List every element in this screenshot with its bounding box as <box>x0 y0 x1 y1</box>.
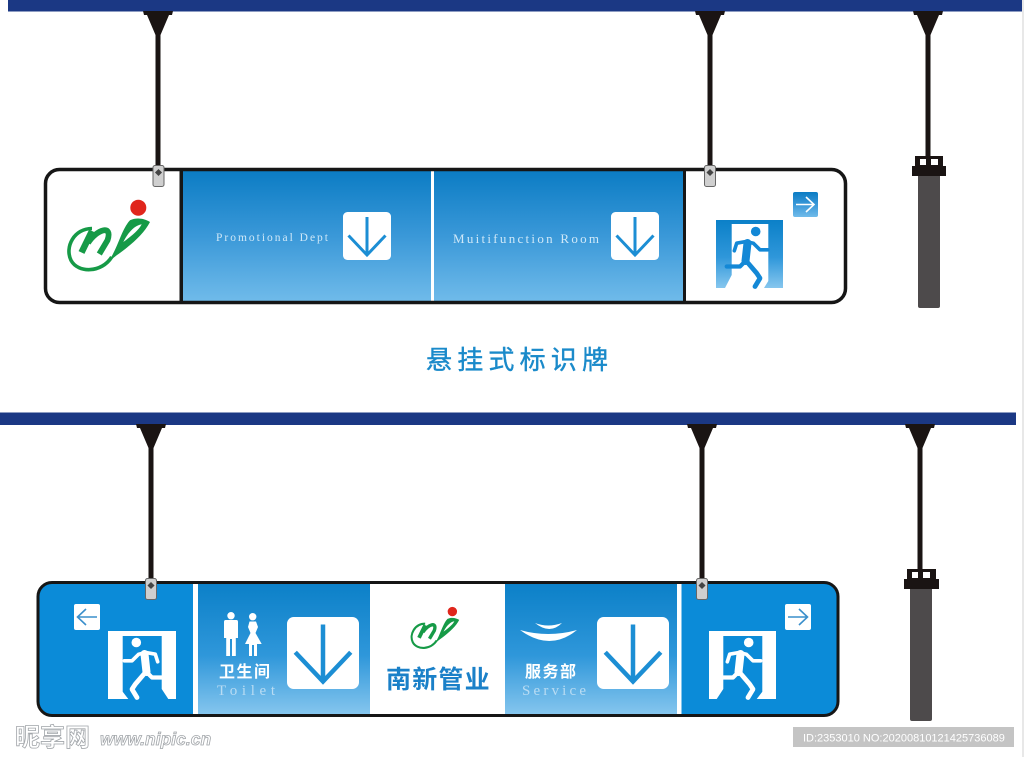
label: service English: Service <box>522 683 586 699</box>
icon: emergency exit, bottom left <box>108 631 176 699</box>
icon: down arrow, toilet <box>287 617 359 689</box>
icon: down arrow, multifunction <box>611 212 659 260</box>
icon: emergency exit, bottom right <box>709 631 776 699</box>
label: Multifunction Room: Muitifunction Room <box>453 231 599 246</box>
heading: hanging sign caption: 悬挂式标识牌 <box>426 345 613 375</box>
hanger rods, top sign <box>143 11 943 166</box>
side view: top sign <box>912 156 946 308</box>
bottom ceiling rail <box>0 412 1016 425</box>
label: toilet English: Toilet <box>217 683 276 699</box>
panel: top blue section right <box>434 170 684 302</box>
label: service Chinese: 服务部 <box>525 662 578 681</box>
icon: down arrow, service <box>597 617 669 689</box>
watermark: nipic <box>15 724 211 752</box>
icon: small right arrow <box>793 192 818 217</box>
label: Promotional Dept: Promotional Dept <box>216 232 329 244</box>
icon: small left arrow <box>74 604 100 630</box>
panel: bottom hanging sign <box>38 582 838 716</box>
watermark: nipic: 昵享网 <box>15 724 90 752</box>
panel: top hanging sign <box>46 170 846 302</box>
watermark: image ID: ID:2353010 NO:20200810121425736089 <box>803 732 1005 744</box>
side view: bottom sign <box>904 569 939 721</box>
top ceiling rail <box>8 0 1024 12</box>
icon: man and woman <box>224 612 262 656</box>
panel: top blue section left <box>181 170 431 302</box>
clips, bottom sign <box>146 578 708 600</box>
brand name: 南新管业 <box>386 666 491 694</box>
icon: down arrow, promotional <box>343 212 391 260</box>
watermark: image ID <box>793 727 1014 747</box>
panel: toilet section <box>193 583 370 715</box>
watermark: nipic: www.nipic.cn <box>100 729 211 749</box>
panel: service section <box>505 583 681 715</box>
icon: service smile <box>520 623 577 641</box>
panel: centre logo section <box>370 584 505 714</box>
logo: top sign <box>69 200 150 270</box>
logo: bottom sign <box>412 607 459 648</box>
hanger rods, bottom sign <box>136 424 935 580</box>
icon: emergency exit, top <box>716 220 783 288</box>
clips, top sign <box>153 166 716 186</box>
icon: small right arrow, bottom <box>785 604 811 630</box>
label: toilet Chinese: 卫生间 <box>219 663 272 681</box>
